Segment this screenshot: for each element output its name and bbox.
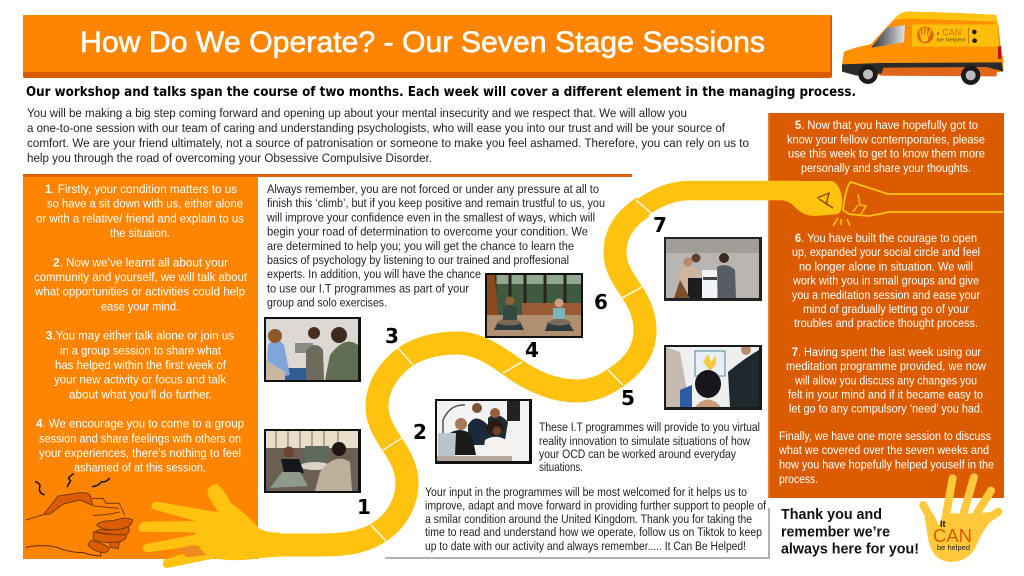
stage numbers: 4 (525, 338, 539, 362)
panel text: stages 5 to 7 (778, 118, 994, 486)
body text: always remember: Always remember, you are not forced or under any pressure at all to (267, 182, 599, 196)
panel: stages 1 to 4: the situaion. (110, 226, 170, 240)
photo: hugging with masks (664, 237, 762, 301)
closing text box: improve, adapt and move forward in providing further support to people of (425, 498, 766, 512)
panel text: stages 5 to 7: mind of gradually letting go of your (803, 302, 969, 316)
panel text: stages 5 to 7: felt in your mind and if it became easy to (788, 388, 983, 402)
intro paragraph: a one-to-one session with our team of caring and understanding psychologists, who will ease you into our trust and will be your source of (27, 121, 726, 135)
body text: I.T programmes: These I.T programmes will provide to you virtual (539, 420, 760, 434)
panel: stages 1 to 4: in a group session to share what (60, 343, 221, 357)
panel text: stages 5 to 7: personally and share your thoughts. (801, 161, 971, 175)
stage numbers: 5 (621, 386, 635, 410)
panel text: stages 5 to 7: 6. You have built the courage to open (795, 231, 977, 245)
panel text: stages 5 to 7: troubles and practice thought process. (794, 316, 978, 330)
panel: stages 1 to 4: ease your mind. (101, 299, 179, 313)
panel text: stages 5 to 7: you a meditation session and ease your (792, 288, 980, 302)
body text: always remember: will improve your confidence even in the smallest of ways, which will (266, 210, 595, 224)
panel text: stages 5 to 7: work with you in small groups and give (792, 274, 979, 288)
body text: I.T programmes: reality innovation to simulate situations of how (539, 434, 750, 448)
panel text: stages 5 to 7: know your fellow contemporaries, please (787, 132, 985, 146)
logo: It CAN be helped hand (923, 477, 998, 562)
panel: stages 1 to 4: so have a sit down with us, either alone (47, 197, 243, 211)
icon: orange van: be helped (937, 38, 965, 44)
panel: stages 1 to 4: has helped within the first week of (55, 358, 227, 372)
logo: It CAN be helped hand: CAN (933, 526, 972, 546)
panel text: stages 5 to 7: use this week to get to know them more (788, 146, 985, 160)
panel: stages 1 to 4: 2. Now we’ve learnt all about your (53, 255, 228, 269)
panel text: stages 5 to 7: up, expanded your social circle and feel (792, 245, 980, 259)
photo: meditation outdoors (485, 273, 583, 338)
body text: always remember: begin your road of determination to overcome your condition. We (267, 225, 588, 239)
body text: I.T programmes: your OCD can be worked around everyday (539, 447, 737, 461)
icon: orange van: CAN (942, 27, 961, 37)
panel text: stages 5 to 7: 5. Now that you have hopefully got to (795, 118, 978, 132)
panel: stages 1 to 4 (23, 174, 632, 559)
stage numbers (357, 213, 667, 519)
intro paragraph: You will be making a big step coming forward and opening up about your mental insecurity and we respect that. We will allow you (27, 106, 687, 120)
panel text: stages 5 to 7: meditation programme provided, we now (786, 359, 986, 373)
panel text: stages 5 to 7: what we covered over the seven weeks and (778, 443, 989, 457)
body text: I.T programmes (539, 420, 760, 474)
body text: always remember: experts. In addition, you will have the chance (267, 267, 481, 281)
thank you message: always here for you! (781, 542, 919, 558)
winding road with seven stages (230, 113, 1004, 545)
intro paragraph: help you through the road of overcoming your Obsessive Compulsive Disorder. (27, 151, 432, 165)
icon: fist bump (780, 181, 1003, 226)
panel: stages 1 to 4: 3.You may either talk alone or join us (46, 329, 234, 343)
panel: stages 1 to 4: community and yourself, we will talk about (34, 270, 248, 284)
stage numbers: 1 (357, 495, 371, 519)
stage numbers: 7 (653, 213, 667, 237)
title: How Do We Operate? - Our Seven Stage Sessions (80, 26, 765, 59)
panel text: stages 5 to 7: 7. Having spent the last week using our (792, 345, 981, 359)
photo: team with laptop (435, 399, 532, 464)
panel text: stages 5 to 7: Finally, we have one more session to discuss (779, 429, 991, 443)
icon: yellow open hand (139, 485, 280, 567)
panel text: stages 5 to 7: how you have hopefully helped youself in the (779, 457, 994, 471)
thank you message: remember we’re (781, 524, 890, 540)
stage numbers: 3 (385, 324, 399, 348)
photo: two people at table (264, 429, 361, 493)
panel: stages 1 to 4: your experiences, there’s nothing to feel (39, 446, 241, 460)
logo: It CAN be helped hand: It (940, 519, 946, 529)
panel: stages 1 to 4: your new activity or focus and talk (54, 373, 227, 387)
title banner (23, 15, 832, 78)
panel: stages 1 to 4: 4. We encourage you to come to a group (36, 417, 244, 431)
body text: I.T programmes: situations. (539, 460, 583, 474)
panel: stages 1 to 4: what opportunities or activities could help (34, 285, 245, 299)
body text: always remember: are determined to help you; you will get the chance to learn the (267, 239, 574, 253)
panel text: stages 5 to 7: will allow you discuss any changes you (794, 373, 977, 387)
intro paragraph: comfort. We are your friend ultimately, not a source of patronisation or someone to make you feel ashamed. Therefore, you can rely on us to (27, 136, 749, 150)
icon: clasped hands (26, 474, 133, 556)
logo: It CAN be helped hand: be helped (937, 543, 970, 552)
closing text box: up to date with our activity and always remember..... It Can Be Helped! (425, 539, 746, 553)
closing text box: Your input in the programmes will be most welcomed for it helps us to (425, 485, 747, 499)
closing text box: time to read and understand how we operate, follow us on Tiktok to keep (425, 525, 762, 539)
thank you message: Thank you and (781, 507, 882, 523)
closing text box: a smilar condition around the United Kingdom. Thank you for taking the (425, 512, 752, 526)
closing text box (385, 485, 769, 558)
icon: orange van (842, 12, 1003, 85)
photo: seen from behind (664, 345, 762, 410)
icon: orange van: It (937, 31, 940, 36)
panel: stages 1 to 4: ashamed of at this session. (74, 461, 206, 475)
body text: always remember: to use our I.T programmes as part of your (267, 281, 469, 295)
body text: always remember: group and solo exercises. (267, 296, 387, 310)
panel: stage 5 to 7 background (768, 113, 1004, 498)
body text: always remember (266, 182, 605, 310)
panel text: stages 5 to 7: let go to any compulsory ‘need’ you had. (789, 402, 983, 416)
body text: always remember: finish this ‘climb’, but if you keep positive and remain trustful to us, you (267, 196, 605, 210)
panel: stages 1 to 4: 1. Firstly, your condition matters to us (45, 182, 237, 196)
panel: stages 1 to 4: session and share feelings with others on (39, 431, 241, 445)
panel text: stages 5 to 7: process. (779, 472, 818, 486)
stage numbers: 2 (413, 420, 427, 444)
stage numbers: 6 (594, 290, 608, 314)
intro paragraph (27, 106, 749, 165)
panel: stages 1 to 4: about what you’ll do further. (69, 387, 212, 401)
thank you message (781, 507, 919, 558)
photo: group talking (264, 317, 361, 382)
panel: stages 1 to 4: or with a relative/ friend and explain to us (36, 211, 244, 225)
panel text: stages 5 to 7: no longer alone in situation. We will (799, 259, 973, 273)
subtitle: Our workshop and talks span the course of two months. Each week will cover a different element in the managing process. (26, 85, 856, 100)
body text: always remember: basics of psychology by listening to our trained and proffesional (267, 253, 569, 267)
